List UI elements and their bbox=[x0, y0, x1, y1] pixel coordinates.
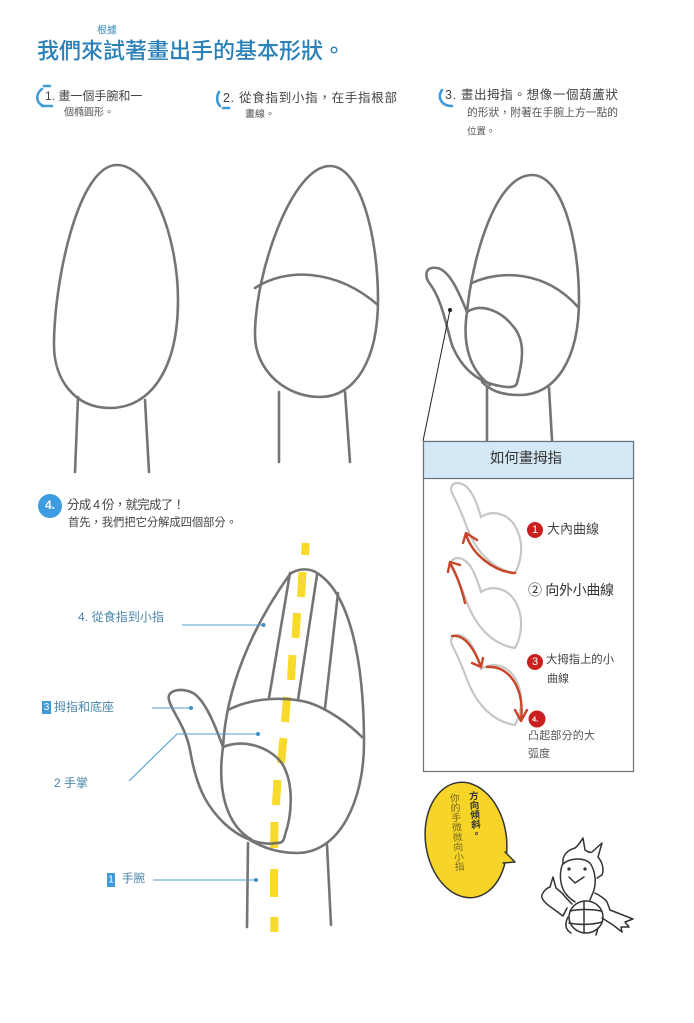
step 2 text bbox=[217, 90, 397, 120]
label: palm bbox=[54, 732, 260, 790]
thumb stroke 3 and 4 bbox=[451, 635, 615, 760]
drawing: step 1 oval and wrist bbox=[54, 165, 178, 472]
label: thumb and base bbox=[42, 699, 193, 714]
label: fingers bbox=[78, 609, 266, 627]
yellow dashed centre line bbox=[274, 543, 306, 932]
step 1 text: 個橢圓形。 bbox=[64, 106, 114, 118]
panel: how to draw the thumb bbox=[424, 442, 634, 772]
step 4 heading: 4. bbox=[45, 498, 55, 512]
thumb stroke 3 and 4: 大拇指上的小 bbox=[546, 652, 615, 666]
thumb stroke 2: ② 向外小曲線 bbox=[528, 582, 614, 598]
step 4 heading bbox=[38, 494, 237, 529]
drawing: step 2 oval with finger line bbox=[255, 166, 378, 462]
step 4 heading: 首先，我們把它分解成四個部分。 bbox=[68, 515, 237, 529]
thumb stroke 3 and 4: 弧度 bbox=[528, 746, 550, 760]
step 3 text: 的形狀，附著在手腕上方一點的 bbox=[467, 106, 618, 119]
callout pointer to thumb panel bbox=[423, 308, 452, 441]
drawing: finished hand divided in four parts bbox=[169, 569, 364, 927]
speech bubble bbox=[418, 777, 515, 903]
label: fingers: 4. 從食指到小指 bbox=[78, 609, 164, 624]
step 3 text: 位置。 bbox=[467, 126, 496, 138]
step 2 text: 2. 從食指到小指，在手指根部 bbox=[223, 90, 397, 105]
step 4 heading: 分成 4 份，就完成了！ bbox=[67, 497, 185, 512]
title: 我們來試著畫出手的基本形狀。 bbox=[37, 38, 345, 64]
speech bubble: 你的手微微向小指 bbox=[447, 791, 465, 872]
label: palm: 2 手掌 bbox=[54, 776, 88, 790]
step 3 text bbox=[440, 87, 618, 138]
thumb stroke 1: 1 bbox=[532, 524, 538, 536]
panel header: 如何畫拇指 bbox=[490, 450, 562, 467]
step 1 text bbox=[37, 86, 142, 118]
thumb stroke 3 and 4: 曲線 bbox=[547, 671, 569, 685]
label: wrist bbox=[107, 871, 258, 887]
thumb stroke 1 bbox=[451, 483, 599, 573]
label: thumb and base: 3 bbox=[44, 702, 50, 713]
thumb stroke 3 and 4: 凸起部分的大 bbox=[528, 728, 595, 742]
label: wrist: 1 bbox=[108, 874, 114, 886]
thumb stroke 2 bbox=[448, 558, 614, 648]
thumb stroke 3 and 4: 3 bbox=[532, 656, 538, 668]
panel header bbox=[424, 442, 634, 478]
step 1 text: 1. 畫一個手腕和一 bbox=[45, 88, 142, 103]
icon: turtle mascot bbox=[542, 838, 633, 935]
thumb stroke 1: 大內曲線 bbox=[547, 522, 599, 536]
drawing: step 3 hand with thumb bbox=[426, 175, 579, 440]
annotation: 根據: 根據 bbox=[97, 24, 117, 36]
label: thumb and base: 拇指和底座 bbox=[54, 699, 114, 714]
label: wrist: 手腕 bbox=[122, 871, 145, 885]
speech bubble: 方向傾斜。 bbox=[466, 790, 482, 839]
step 2 text: 畫線。 bbox=[245, 108, 275, 120]
thumb stroke 3 and 4: 4. bbox=[532, 714, 538, 724]
step 3 text: 3. 畫出拇指。想像一個葫蘆狀 bbox=[445, 87, 618, 102]
